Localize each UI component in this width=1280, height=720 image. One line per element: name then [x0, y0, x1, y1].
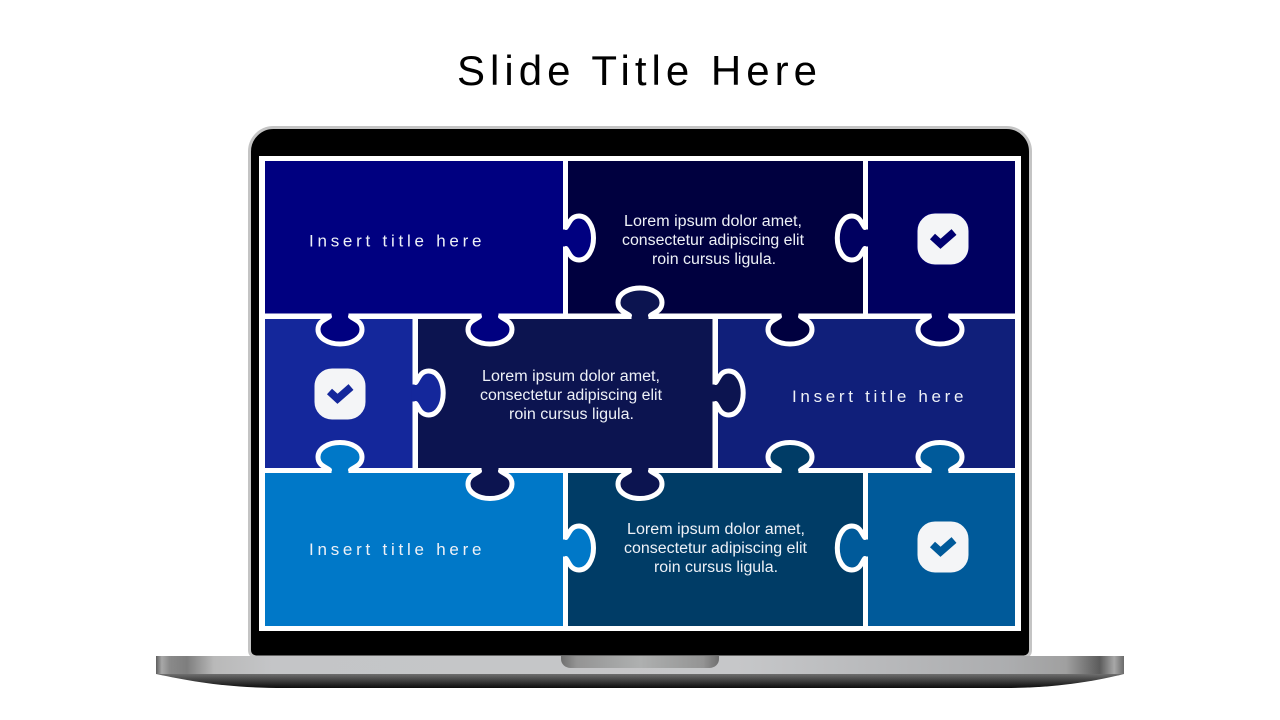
- icon: check badge row 1: [917, 213, 969, 265]
- panel: row 1 left: [265, 161, 563, 314]
- panel: row 3 middle: [568, 473, 863, 626]
- panel: row 1 middle: [568, 161, 863, 314]
- panel: row 1 right: [868, 161, 1015, 314]
- text: row 3 middle: [624, 521, 808, 576]
- laptop base lower curve: [156, 674, 1124, 688]
- laptop screen bezel: [250, 128, 1030, 657]
- laptop: [156, 128, 1124, 688]
- laptop base top band: [156, 656, 1124, 674]
- label: row 2 right: Insert title here: [792, 387, 964, 406]
- icon: check badge row 2: [314, 368, 366, 420]
- text: row 2 middle: consectetur adipiscing elit: [480, 387, 663, 404]
- title: Slide Title Here: [457, 47, 817, 94]
- text: row 1 middle: consectetur adipiscing elit: [622, 232, 805, 249]
- puzzle knobs: [318, 216, 962, 570]
- puzzle grid: [265, 161, 1015, 626]
- label: row 3 left: Insert title here: [309, 540, 482, 559]
- icon: check badge row 3: [917, 521, 969, 573]
- text: row 2 middle: roin cursus ligula.: [509, 406, 634, 423]
- panel: row 2 left: [265, 319, 412, 468]
- text: row 2 middle: Lorem ipsum dolor amet,: [482, 368, 660, 385]
- text: row 2 middle: [480, 368, 663, 423]
- panel: row 2 middle: [418, 319, 712, 468]
- text: row 1 middle: Lorem ipsum dolor amet,: [624, 213, 802, 230]
- laptop notch: [561, 656, 719, 668]
- text: row 3 middle: consectetur adipiscing elit: [624, 540, 808, 557]
- panel: row 2 right: [718, 319, 1015, 468]
- text: row 1 middle: roin cursus ligula.: [652, 251, 776, 268]
- panel: row 3 right: [868, 473, 1015, 626]
- text: row 3 middle: Lorem ipsum dolor amet,: [627, 521, 805, 538]
- text: row 3 middle: roin cursus ligula.: [654, 559, 778, 576]
- text: row 1 middle: [622, 213, 805, 268]
- label: row 1 left: Insert title here: [309, 232, 482, 250]
- panel: row 3 left: [265, 473, 563, 626]
- puzzle frame: [259, 156, 1021, 631]
